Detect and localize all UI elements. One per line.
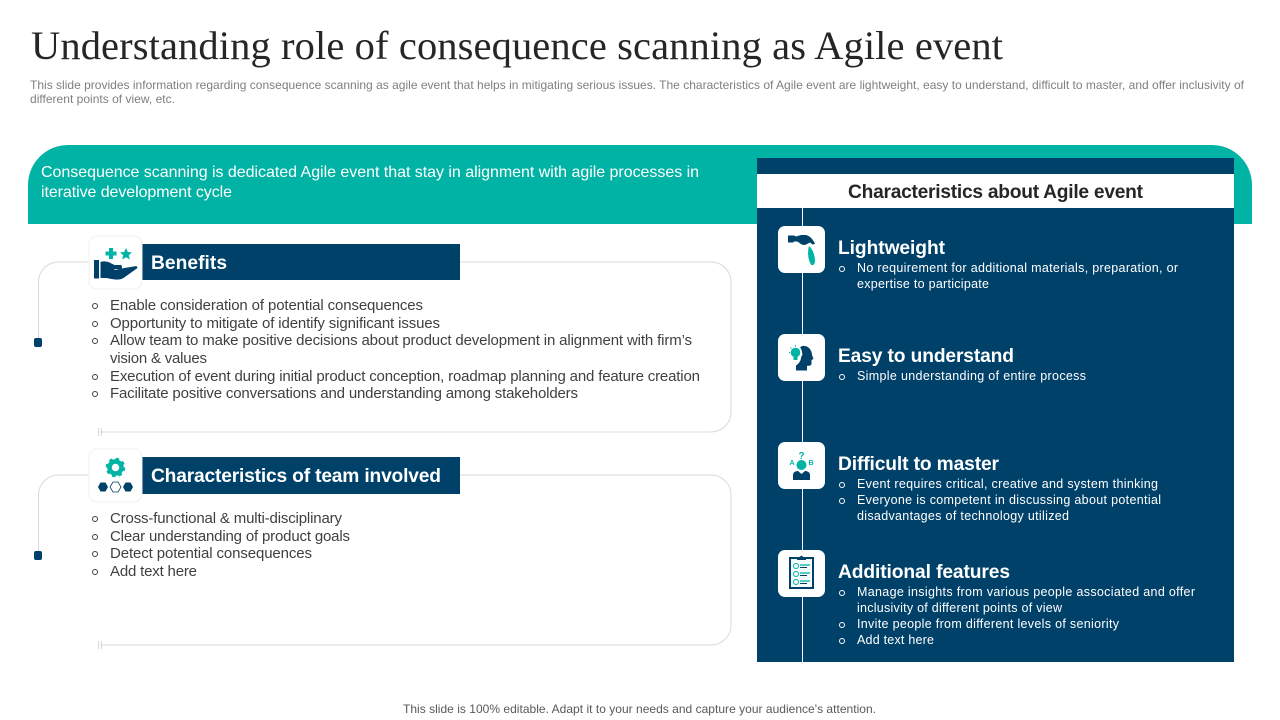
icon: hand dropping feather: [778, 226, 825, 273]
bullet list: benefits: [92, 297, 700, 402]
item: difficult to master: [778, 442, 1161, 523]
item: difficult to master: Event requires critical, creative and system thinking: [857, 477, 1158, 491]
description text: [30, 78, 1245, 106]
panel outline: benefits: [38, 262, 731, 436]
item: additional features: Invite people from different levels of seniority: [857, 617, 1120, 631]
connector dot: [34, 551, 42, 560]
description text: This slide provides information regarding consequence scanning as agile event that helps in mitigating serious issues. The characteristics of Agile event are lightweight, easy to understand, difficult to master, and offer inclusivity of: [30, 78, 1245, 92]
item: additional features: Add text here: [857, 633, 934, 647]
panel heading: [757, 174, 1234, 208]
bullet list: benefits: Execution of event during initial product conception, roadmap planning and feature creation: [110, 368, 700, 385]
icon: person with question marks: ?: [798, 451, 805, 462]
description text: different points of view, etc.: [30, 92, 175, 106]
icon: hand with stars: [89, 236, 142, 289]
footer note: This slide is 100% editable. Adapt it to your needs and capture your audience's attention.: [403, 702, 876, 716]
item: additional features: Manage insights from various people associated and offer: [857, 585, 1195, 599]
icon: person with question marks: [778, 442, 825, 489]
panel outline: team: [38, 475, 731, 649]
bullet list: benefits: vision & values: [110, 350, 207, 367]
timeline line: [802, 208, 804, 662]
item: additional features: [778, 550, 1195, 647]
connector dot: [34, 338, 42, 347]
item: lightweight: [778, 226, 1178, 291]
bullet list: team: Detect potential consequences: [110, 545, 312, 562]
heading bar: benefits: Benefits: [151, 253, 227, 274]
bullet list: benefits: Allow team to make positive decisions about product development in alignment with firm’s: [110, 332, 692, 349]
bullet list: team: Cross-functional & multi-disciplinary: [110, 510, 342, 527]
item: difficult to master: disadvantages of technology utilized: [857, 509, 1069, 523]
panel: characteristics about Agile event: [757, 158, 1234, 662]
panel heading: Characteristics about Agile event: [848, 182, 1144, 203]
item: additional features: inclusivity of different points of view: [857, 601, 1063, 615]
bullet list: benefits: Opportunity to mitigate of identify significant issues: [110, 315, 440, 332]
teal banner: Consequence scanning is dedicated Agile event that stay in alignment with agile processes in: [41, 164, 699, 181]
heading bar: benefits: [142, 244, 460, 280]
heading bar: team: [142, 457, 460, 494]
teal banner: [28, 145, 1252, 224]
icon: gear and hexagons: [89, 449, 142, 502]
bullet list: benefits: Facilitate positive conversations and understanding among stakeholders: [110, 385, 578, 402]
icon: person with question marks: B: [808, 460, 814, 467]
panel: team: [34, 449, 731, 649]
item: lightweight: Lightweight: [838, 238, 946, 259]
icon: head with light bulb: [778, 334, 825, 381]
item: easy to understand: [778, 334, 1086, 383]
item: lightweight: No requirement for additional materials, preparation, or: [857, 261, 1178, 275]
bullet list: benefits: Enable consideration of potential consequences: [110, 297, 423, 314]
item: additional features: Additional features: [838, 562, 1010, 583]
bullet list: team: [92, 510, 350, 580]
teal banner: iterative development cycle: [41, 184, 232, 201]
item: lightweight: expertise to participate: [857, 277, 989, 291]
heading bar: team: Characteristics of team involved: [151, 466, 441, 487]
item: easy to understand: Simple understanding of entire process: [857, 369, 1086, 383]
item: difficult to master: Difficult to master: [838, 454, 1000, 475]
icon: clipboard checklist: [778, 550, 825, 597]
icon: person with question marks: A: [789, 460, 795, 467]
bullet list: team: Add text here: [110, 563, 197, 580]
item: easy to understand: Easy to understand: [838, 346, 1014, 367]
panel: benefits: [34, 236, 731, 436]
title: Understanding role of consequence scanning as Agile event: [31, 23, 1004, 68]
bullet list: team: Clear understanding of product goals: [110, 528, 350, 545]
item: difficult to master: Everyone is competent in discussing about potential: [857, 493, 1161, 507]
